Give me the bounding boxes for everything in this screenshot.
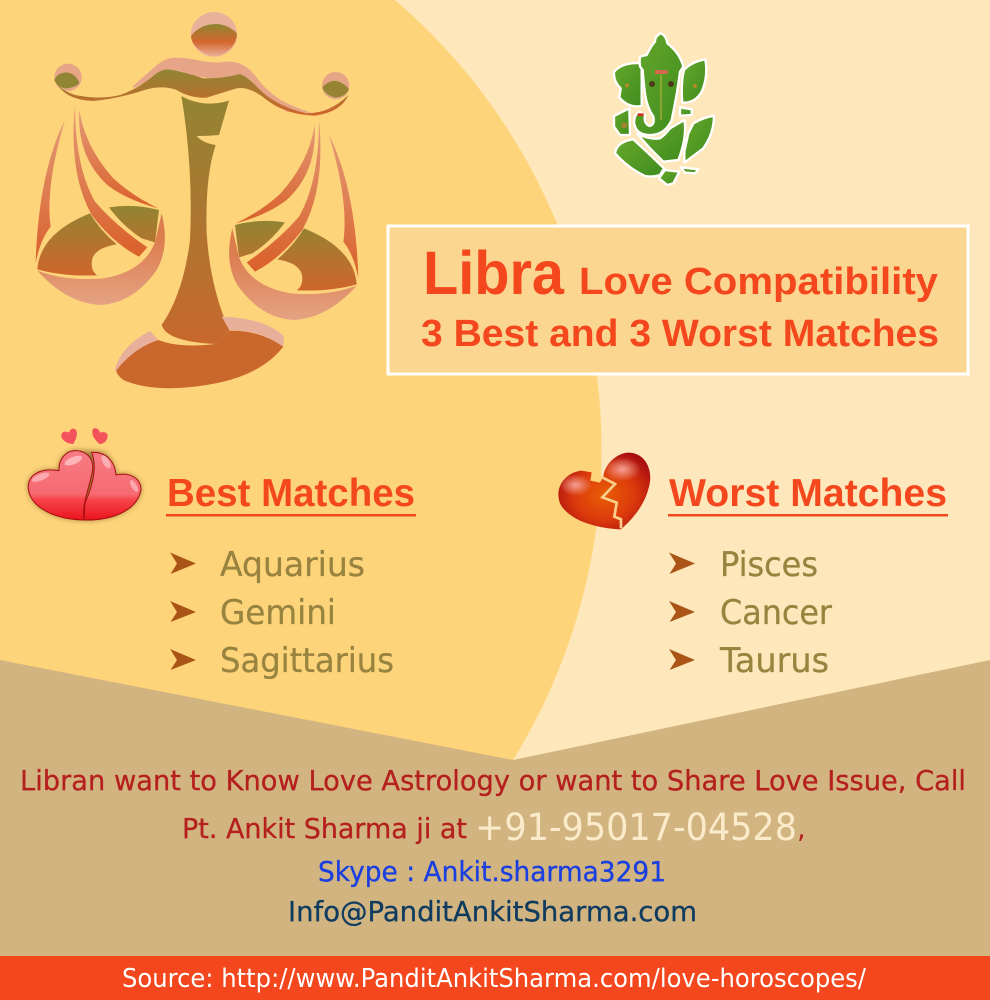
list: best matches: Gemini: [220, 593, 336, 633]
subtitle: 3 Best and 3 Worst Matches: [421, 313, 939, 355]
heading: best matches: Best Matches: [167, 472, 415, 515]
list: best matches: [170, 545, 394, 681]
contact line with phone number: Pt. Ankit Sharma ji at: [182, 813, 467, 845]
contact line with phone number: ,: [797, 813, 806, 845]
list: worst matches: Taurus: [719, 641, 829, 681]
source bar background: [0, 956, 990, 1000]
title: Libra: Libra: [423, 239, 565, 307]
tan footer panel: [0, 660, 990, 1000]
list: worst matches: Cancer: [720, 593, 832, 633]
list: worst matches: [669, 545, 832, 681]
list: best matches: Sagittarius: [220, 641, 394, 681]
icon: ganesha of leaves: [614, 33, 714, 185]
orange circle background: [0, 0, 602, 760]
icon: libra scales: [36, 12, 358, 388]
email contact: Info@PanditAnkitSharma.com: [288, 896, 697, 928]
icon: broken heart: [558, 453, 650, 529]
call to action text: Libran want to Know Love Astrology or want to Share Love Issue, Call: [20, 765, 966, 797]
panel: title box: [388, 226, 968, 374]
heading: worst matches: Worst Matches: [669, 472, 947, 515]
icon: two hearts: [28, 428, 141, 520]
skype contact: Skype : Ankit.sharma3291: [318, 856, 666, 888]
contact line with phone number: +91-95017-04528: [475, 806, 797, 849]
list: worst matches: Pisces: [720, 545, 818, 585]
contact line with phone number: [182, 806, 806, 849]
source line: Source: http://www.PanditAnkitSharma.com/love-horoscopes/: [122, 964, 866, 994]
title: love compatibility: Love Compatibility: [579, 261, 938, 303]
list: best matches: Aquarius: [220, 545, 365, 585]
